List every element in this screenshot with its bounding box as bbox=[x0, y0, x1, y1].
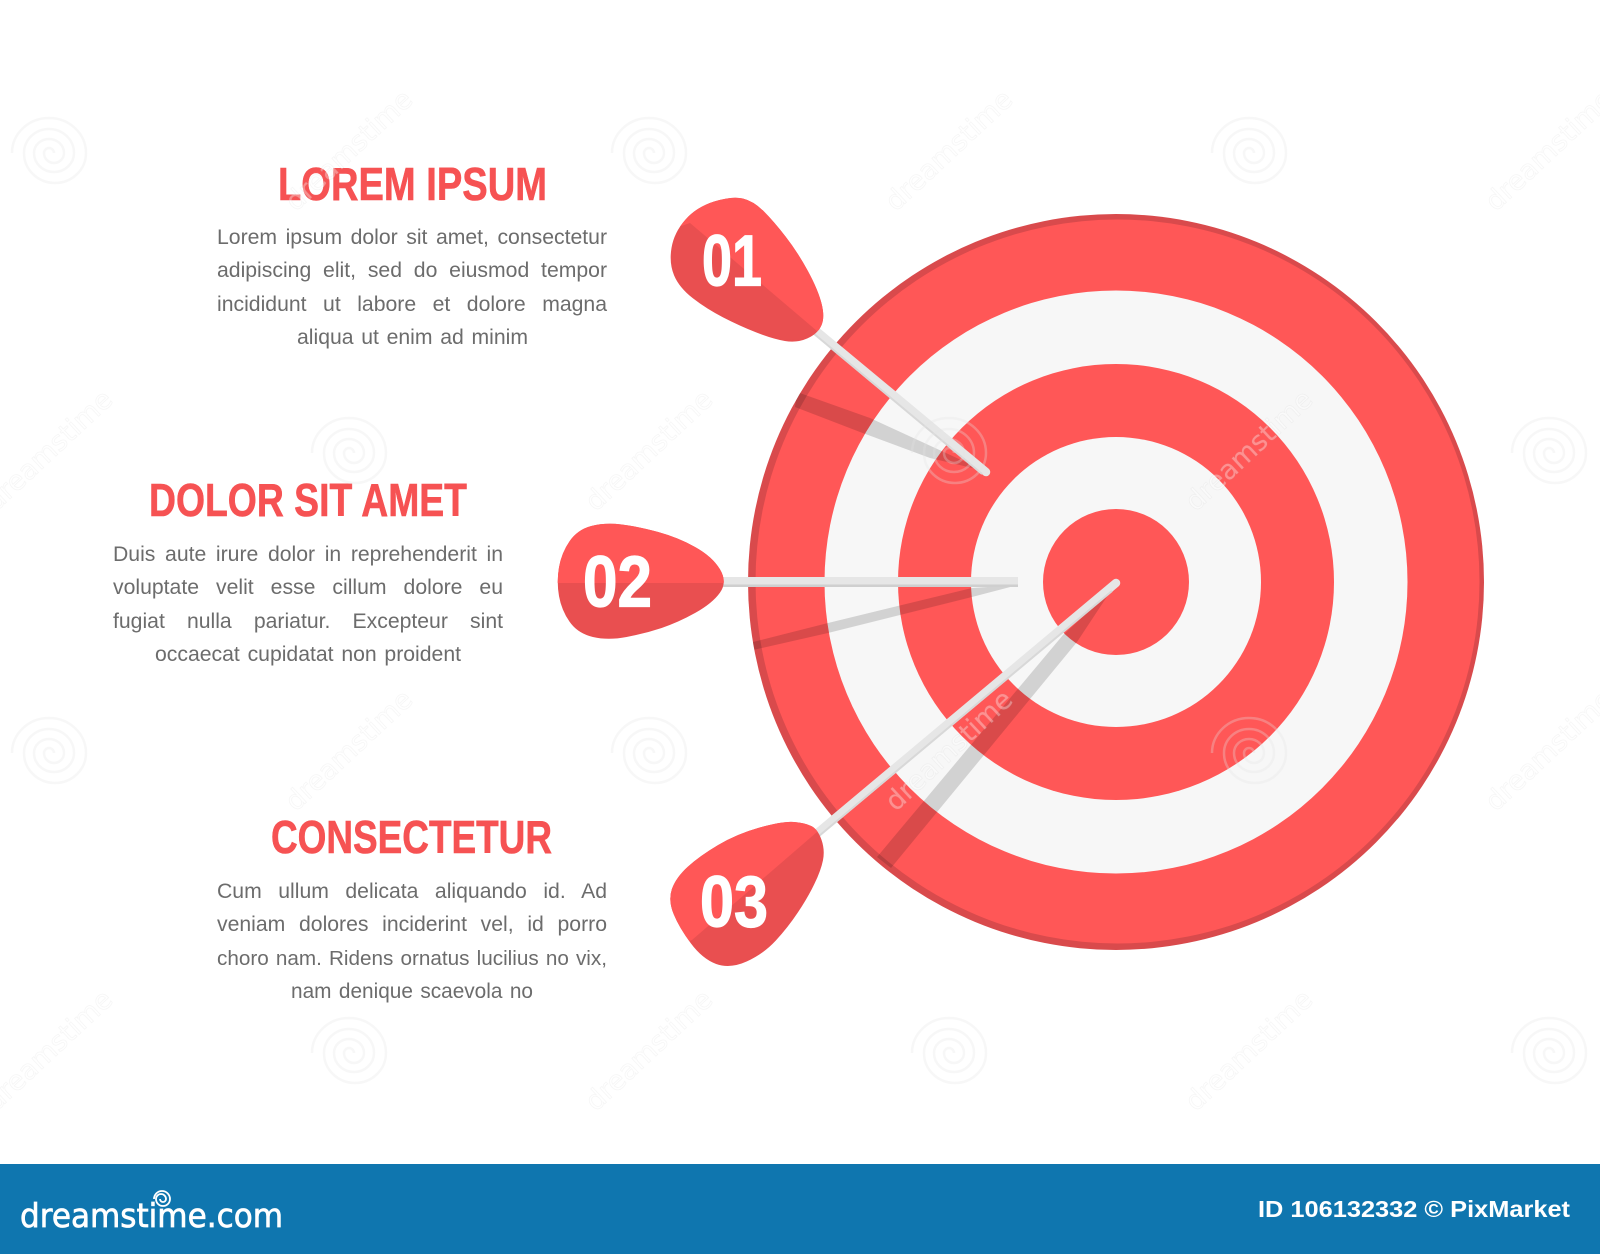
panel: lorem ipsum bbox=[217, 158, 608, 349]
text block: dolor sit amet: occaecat cupidatat non proident bbox=[155, 643, 461, 666]
target board bbox=[748, 214, 1484, 950]
watermark overlay: dreamstime bbox=[579, 984, 719, 1117]
panel: dolor sit amet bbox=[113, 474, 503, 666]
dart 02 bbox=[558, 524, 1018, 638]
dart 01: 01 bbox=[702, 222, 762, 302]
text block: lorem ipsum: Lorem ipsum dolor sit amet, consectetur bbox=[217, 226, 607, 249]
dart 03 bbox=[671, 583, 1116, 965]
text block: dolor sit amet bbox=[113, 543, 503, 666]
text block: consectetur: choro nam. Ridens ornatus lucilius no vix, bbox=[217, 947, 607, 970]
dart shadows on target bbox=[753, 392, 1110, 868]
dart 03: 03 bbox=[700, 862, 768, 942]
text block: lorem ipsum: aliqua ut enim ad minim bbox=[297, 326, 528, 349]
text block: consectetur: Cum ullum delicata aliquando id. Ad bbox=[217, 880, 607, 903]
text block: consectetur: nam denique scaevola no bbox=[291, 980, 533, 1003]
image id and credit: ID 106132332 © PixMarket bbox=[1258, 1196, 1570, 1222]
footer bar bbox=[0, 1164, 1600, 1254]
watermark overlay: dreamstime bbox=[1179, 984, 1319, 1117]
text block: dolor sit amet: Duis aute irure dolor in reprehenderit in bbox=[113, 543, 503, 566]
panel: consectetur bbox=[217, 811, 607, 1003]
watermark overlay: dreamstime bbox=[1179, 384, 1319, 517]
text block: dolor sit amet: fugiat nulla pariatur. Excepteur sint bbox=[113, 610, 503, 633]
text block: dolor sit amet: voluptate velit esse cillum dolore eu bbox=[113, 576, 503, 599]
text block: lorem ipsum: incididunt ut labore et dolore magna bbox=[217, 293, 607, 316]
footer logo: dreamstime.com bbox=[20, 1196, 283, 1235]
text block: lorem ipsum bbox=[217, 226, 608, 349]
watermark overlay: dreamstime bbox=[879, 684, 1019, 817]
text block: consectetur bbox=[217, 880, 607, 1003]
text block: consectetur: veniam dolores inciderint vel, id porro bbox=[217, 913, 607, 936]
dart 01 bbox=[672, 199, 986, 474]
heading: consectetur: CONSECTETUR bbox=[271, 811, 552, 863]
watermark overlay: dreamstime bbox=[879, 84, 1019, 217]
watermark overlay: dreamstime bbox=[279, 84, 419, 217]
watermark overlay: dreamstime bbox=[579, 384, 719, 517]
target with darts bbox=[558, 198, 1484, 966]
text block: lorem ipsum: adipiscing elit, sed do eiusmod tempor bbox=[217, 259, 607, 282]
dart 02: 02 bbox=[583, 542, 652, 622]
heading: lorem ipsum: LOREM IPSUM bbox=[278, 158, 547, 210]
watermark overlay: dreamstime bbox=[279, 684, 419, 817]
heading: dolor sit amet: DOLOR SIT AMET bbox=[149, 474, 467, 526]
